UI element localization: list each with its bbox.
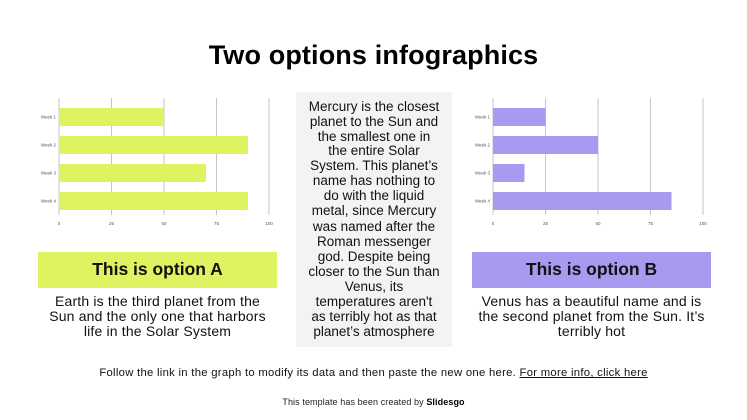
panel: centre text: the entire Solar: [328, 143, 420, 158]
heading: option B: This is option B: [526, 259, 657, 279]
text: option A description: [49, 293, 266, 339]
panel: centre text: Mercury is the closest: [309, 99, 439, 114]
heading: option B: [472, 252, 711, 288]
bar chart: option A: 50: [161, 221, 167, 226]
panel: centre text: name has nothing to: [313, 173, 435, 188]
bar chart: option A: [40, 98, 273, 226]
footer note with link: Follow the link in the graph to modify its data and then paste the new one here. For more info, click here: [99, 367, 648, 379]
credit: This template has been created by Slidesgo: [282, 397, 465, 407]
panel: centre text: closer to the Sun than: [308, 264, 440, 279]
panel: centre text: [296, 92, 452, 347]
panel: centre text: planet to the Sun and: [310, 114, 438, 129]
bar chart: option B: Week 3: [475, 170, 490, 176]
text: option B description: the second planet from the Sun. It’s: [478, 308, 705, 324]
bar chart: option B: Week 1: [475, 114, 490, 120]
panel: centre text: Venus, its: [345, 279, 403, 294]
bar chart: option B: Week 2: [475, 142, 490, 148]
heading: option A: This is option A: [92, 259, 223, 279]
panel: centre text: do with the liquid: [324, 188, 424, 203]
panel: centre text: metal, since Mercury: [312, 203, 436, 218]
bar chart: option A: Week 3: [41, 170, 56, 176]
heading: option A: [38, 252, 277, 288]
bar chart: option B: 75: [648, 221, 653, 226]
panel: centre text: as terribly hot as that: [311, 309, 437, 324]
bar chart: option A: Week 2: [41, 142, 56, 148]
bar chart: option A: 100: [265, 221, 273, 226]
title: Two options infographics: [209, 40, 538, 70]
bar chart: option B: 0: [492, 221, 495, 226]
bar chart: option B: 25: [543, 221, 548, 226]
text: option B description: terribly hot: [558, 323, 625, 339]
text: option B description: Venus has a beautiful name and is: [482, 293, 701, 309]
text: option A description: life in the Solar System: [84, 323, 231, 339]
panel: centre text: System. This planet’s: [310, 158, 438, 173]
bar chart: option B: [474, 98, 707, 226]
panel: centre text: god. Despite being: [318, 249, 430, 264]
text: option A description: Sun and the only one that harbors: [49, 308, 266, 324]
bar chart: option A: 0: [58, 221, 61, 226]
panel: centre text: Roman messenger: [317, 234, 431, 249]
bar chart: option A: 25: [109, 221, 114, 226]
bar chart: option B: 100: [699, 221, 707, 226]
panel: centre text: temperatures aren't: [316, 294, 432, 309]
text: option B description: [478, 293, 705, 339]
bar chart: option B: 50: [595, 221, 601, 226]
bar chart: option A: Week 4: [41, 198, 56, 204]
panel: centre text: the smallest one in: [318, 129, 430, 144]
panel: centre text: was named after the: [313, 219, 435, 234]
text: option A description: Earth is the third planet from the: [55, 293, 260, 309]
bar chart: option A: Week 1: [41, 114, 56, 120]
bar chart: option A: 75: [214, 221, 219, 226]
panel: centre text: planet’s atmosphere: [313, 324, 435, 339]
bar chart: option B: Week 4: [475, 198, 490, 204]
